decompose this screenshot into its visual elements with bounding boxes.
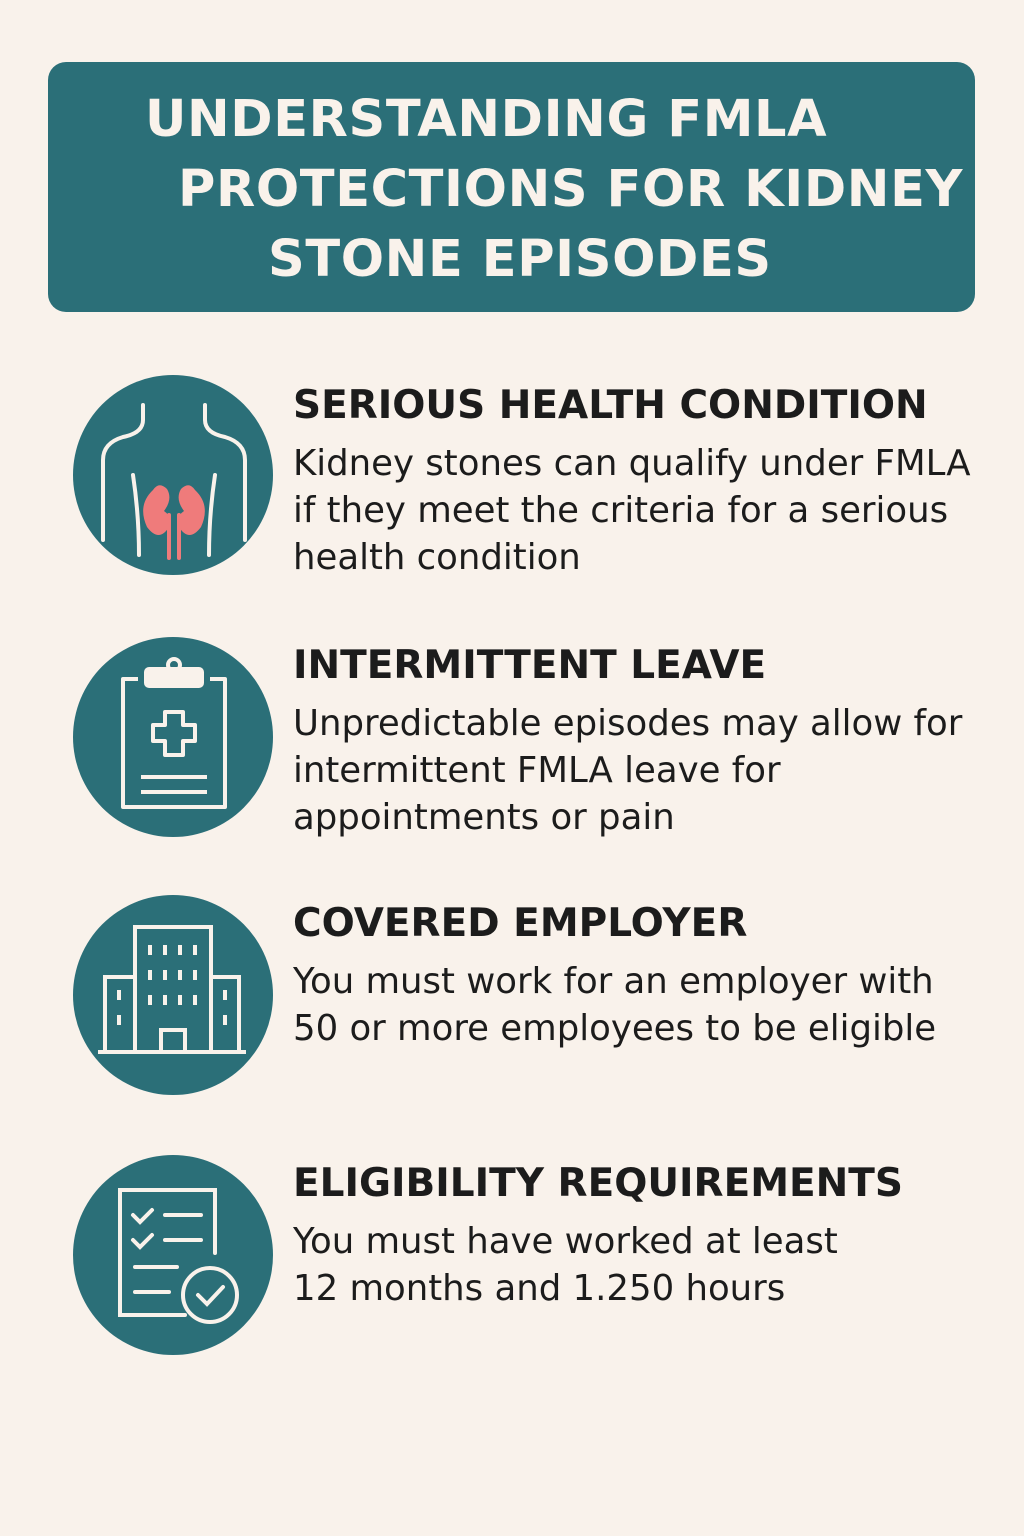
icon: body with kidneys <box>73 375 273 575</box>
icon: clipboard <box>73 637 273 837</box>
item: serious health condition: if they meet the criteria for a serious <box>293 490 948 531</box>
item: serious health condition <box>293 383 970 578</box>
item: serious health condition: Kidney stones can qualify under FMLA <box>293 443 970 484</box>
item: covered employer: 50 or more employees to be eligible <box>293 1008 936 1049</box>
item: covered employer <box>293 901 936 1049</box>
item: serious health condition: health condition <box>293 537 581 578</box>
title: UNDERSTANDING FMLA <box>145 90 827 149</box>
item: eligibility requirements <box>293 1161 903 1309</box>
icon: checklist <box>73 1155 273 1355</box>
item: covered employer: You must work for an employer with <box>293 961 934 1002</box>
item: intermittent leave: appointments or pain <box>293 797 675 838</box>
item: serious health condition: SERIOUS HEALTH CONDITION <box>293 383 928 428</box>
title: PROTECTIONS FOR KIDNEY <box>178 160 963 219</box>
icon: building <box>73 895 273 1095</box>
item: eligibility requirements: You must have worked at least <box>293 1221 838 1262</box>
item: eligibility requirements: 12 months and 1.250 hours <box>293 1268 785 1309</box>
item: intermittent leave: Unpredictable episodes may allow for <box>293 703 962 744</box>
item: covered employer: COVERED EMPLOYER <box>293 901 747 946</box>
title <box>48 62 975 312</box>
item: intermittent leave: intermittent FMLA leave for <box>293 750 781 791</box>
title: STONE EPISODES <box>268 230 772 289</box>
item: eligibility requirements: ELIGIBILITY REQUIREMENTS <box>293 1161 903 1206</box>
item: intermittent leave: INTERMITTENT LEAVE <box>293 643 766 688</box>
item: intermittent leave <box>293 643 962 838</box>
